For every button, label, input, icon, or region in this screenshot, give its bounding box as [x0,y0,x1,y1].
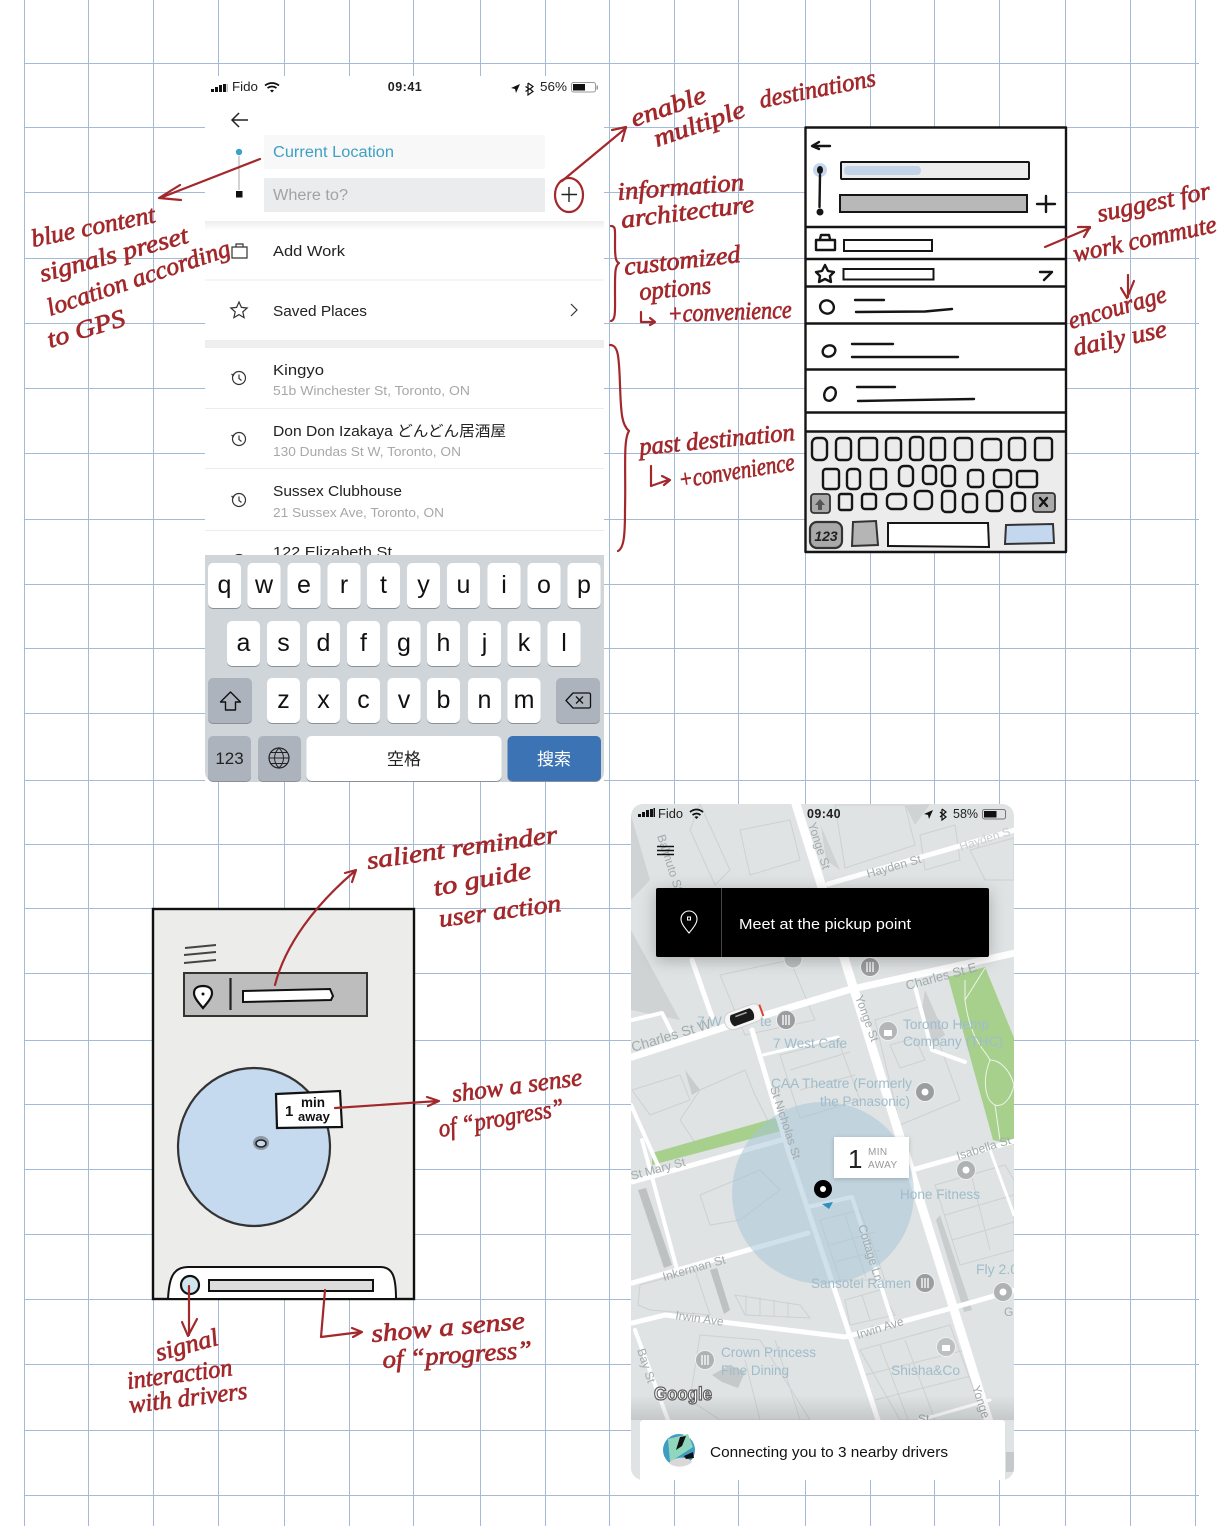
annotation: information architecture [616,169,756,234]
keyboard: a [237,629,251,657]
annotation: suggest for work commute [1045,177,1219,362]
map: pickup radius [732,1102,914,1284]
sketch: recent row 2 [821,343,958,359]
map: buildings [631,804,1014,1425]
card: 1 min away: 1 [848,1144,862,1174]
map: place labels: te [760,1013,772,1029]
card: 1 min away: MIN [868,1147,888,1158]
map: place labels: Company (THC) [903,1033,1003,1049]
list item: add work [232,243,346,260]
card: 1 min away: AWAY [868,1160,898,1171]
map: street labels: Bay St [634,1347,659,1385]
sketch: saved places row [816,265,1052,282]
list item: Don Don Izakaya: 130 Dundas St W, Toronto, ON [273,445,461,459]
keyboard: q [218,571,231,599]
status bar: 58% [953,807,978,821]
sketch: reminder banner [184,973,367,1016]
annotation: enable multiple destinations: destinations [757,65,878,114]
map: place labels: Fine Dining [721,1362,789,1378]
annotation: show a sense of progress (label): show a sense [450,1064,584,1108]
sketch: recent row 3 [822,385,974,403]
field: where to [264,178,545,212]
keyboard: b [437,686,450,714]
logo: Google: Google [654,1384,712,1404]
annotation: blue content note: signals preset [37,222,192,288]
keyboard [205,555,604,782]
panel: destination wireframe sketch [805,127,1066,552]
map: place labels: 7 West Cafe [773,1035,847,1051]
icon: back arrow [232,113,248,127]
field: current location [264,135,545,169]
card: 1 min away [834,1137,909,1178]
annotation: salient reminder: to guide [431,857,533,902]
annotation: show a sense of progress (card): of “progress” [382,1337,533,1374]
keyboard: x [317,686,330,714]
annotation: suggest for work commute: encourage [1065,281,1170,335]
map: place labels: CAA Theatre (Formerly [771,1075,912,1091]
sketch: add work row [816,235,932,251]
annotation: show a sense of progress (label) [335,1064,584,1143]
annotation: customized options bracket: options [638,272,712,306]
annotation: suggest for work commute: work commute [1071,211,1219,268]
map: place labels: Toronto Hemp [903,1016,989,1032]
annotation: show a sense of progress (card): show a sense [370,1308,526,1348]
keyboard: l [561,629,567,657]
annotation: information architecture: information [616,169,745,206]
map: place labels: the Panasonic) [820,1093,910,1109]
map: street labels: St Nicholas St [767,1085,804,1161]
list item: Kingyo: 51b Winchester St, Toronto, ON [273,384,470,398]
sketch: min away label: away [298,1109,331,1124]
map: street labels [629,821,1013,1426]
annotation: past destination bracket: +convenience [677,449,796,494]
list item: Kingyo: Kingyo [273,362,324,379]
icon: menu [657,846,674,854]
keyboard: k [518,629,531,657]
sketch: destination field [840,195,1027,212]
annotation: signal interaction with drivers: with drivers [127,1378,249,1419]
annotation: show a sense of progress (card) [321,1290,533,1374]
keyboard: r [340,571,348,599]
field: current location: Current Location [273,144,394,161]
list item: Don Don Izakaya: Don Don Izakaya どんどん居酒屋 [273,423,506,440]
list item: Kingyo [232,362,470,398]
annotation: enable multiple destinations: multiple [650,96,749,153]
map: place labels: Shisha&Co [891,1362,960,1378]
keyboard: m [514,686,534,714]
map: place labels: Crown Princess [721,1344,816,1360]
icon: car [724,1004,764,1030]
route markers [236,149,242,198]
panel: pickup wireframe sketch [153,909,414,1299]
sketch: recent row 1 [818,298,952,316]
sketch: min away label [276,1091,342,1128]
annotation: salient reminder: salient reminder [365,821,559,875]
status bar: 09:41 [388,80,422,94]
map: street labels: Yonge St [805,821,834,871]
annotation: show a sense of progress (label): of “progress” [436,1094,566,1143]
annotation: blue content note: blue content [29,201,159,253]
panel: map pickup screenshot [629,804,1018,1482]
keyboard: j [481,629,487,657]
sketch: back arrow [812,142,830,149]
annotation: information architecture: architecture [619,191,756,234]
map: street labels: Isabella St [955,1133,1013,1163]
annotation: signal interaction with drivers: interaction [125,1354,234,1395]
annotation: blue content note: to GPS [44,305,129,354]
map: place labels: Fly 2.0 [976,1261,1018,1277]
list item: add work: Add Work [273,243,346,260]
keyboard: 搜索 [537,750,571,769]
map: place labels: Sansotei Ramen [811,1275,911,1291]
keyboard: i [501,571,507,599]
sketch: pickup radius circle [178,1068,330,1226]
status bar: 56% [540,80,567,94]
list item: 122 Elizabeth St [235,546,392,555]
status bar [211,80,598,95]
keyboard: y [417,571,430,599]
list item: Sussex Clubhouse [232,483,444,520]
icon: add destination plus [562,187,577,202]
keyboard: f [360,629,367,657]
map: place labels: 7 W [697,1013,723,1029]
annotation: salient reminder [275,821,563,985]
card: connecting to drivers: Connecting you to 3 nearby drivers [710,1444,948,1461]
keyboard: v [398,686,411,714]
panel: destination search screenshot [205,76,604,782]
pickup marker [814,1180,833,1209]
map: park [652,967,1015,1165]
annotation: customized options bracket: +convenience [667,297,792,328]
status bar: Fido [232,80,258,94]
map: place labels [697,1013,1018,1378]
keyboard: u [457,571,470,599]
map: roads [631,804,1015,1425]
map: street labels: St Mary St [629,1155,688,1183]
keyboard: h [437,629,450,657]
list item: Sussex Clubhouse: 21 Sussex Ave, Toronto, ON [273,506,444,520]
icon: driver avatar [663,1434,695,1467]
annotation: enable multiple destinations [555,65,878,212]
sketch: menu icon [184,945,216,963]
map: street labels: Balmuto St [654,833,686,893]
sketch: keyboard: 123 [814,528,838,544]
list item: Don Don Izakaya [232,423,506,459]
sketch: min away label: 1 [285,1103,293,1120]
annotation: past destination bracket [610,345,796,551]
sketch: min away label: min [301,1095,325,1110]
annotation: suggest for work commute: daily use [1071,316,1169,362]
status bar [638,807,1006,821]
annotation: signal interaction with drivers: signal [153,1324,221,1367]
map: street labels: Yonge [969,1384,993,1420]
map: street labels: Inkerman St [661,1252,728,1284]
card: connecting to drivers [640,1420,1005,1482]
keyboard: s [277,629,290,657]
map: street labels: Irwin Ave [855,1314,906,1342]
map: street labels: Charles St E [904,959,979,993]
map: street labels: Hayden S [958,824,1012,854]
annotation: blue content note: location according [43,235,234,322]
annotation: customized options bracket: customized [623,241,742,281]
annotation: past destination bracket: past destination [636,419,796,461]
banner: meet at pickup point: Meet at the pickup point [739,916,912,933]
annotation: blue content note [29,159,260,354]
map: street labels: Yonge St [852,993,882,1044]
keyboard: 空格 [387,750,421,769]
sketch: keyboard [810,437,1055,548]
map: street labels: Irwin Ave [675,1308,725,1329]
keyboard: o [537,571,551,599]
field: where to: Where to? [273,187,348,204]
sketch: current location field [841,162,1029,179]
keyboard: z [277,686,290,714]
keyboard: g [397,629,411,657]
keyboard: 123 [215,749,244,768]
annotation: signal interaction with drivers [125,1286,249,1419]
keyboard: d [317,629,330,657]
annotation: customized options bracket [611,226,792,328]
map: street labels: St [918,1412,930,1426]
status bar: Fido [658,807,683,821]
map: street labels: Hayden St [865,852,923,881]
banner: meet at pickup point [656,888,989,957]
map: street labels: Cottage Ln [855,1223,886,1283]
list item: saved places: Saved Places [273,303,367,320]
map: street labels: Charles St W [629,1015,713,1055]
keyboard: n [478,686,491,714]
keyboard: t [380,571,387,599]
map: place labels: Hone Fitness [900,1186,980,1202]
keyboard: e [297,571,311,599]
map: place markers [696,950,1012,1370]
keyboard: p [577,571,591,599]
list item: Sussex Clubhouse: Sussex Clubhouse [273,483,402,500]
keyboard: w [254,571,274,599]
annotation: suggest for work commute: suggest for [1095,177,1213,228]
list item: saved places [231,302,577,320]
annotation: enable multiple destinations: enable [627,82,710,133]
list item: 122 Elizabeth St: 122 Elizabeth St [273,544,393,561]
sketch: route markers [813,163,827,216]
sketch: bottom card [168,1267,396,1299]
sketch: plus [1037,196,1055,212]
keyboard: c [357,686,370,714]
status bar: 09:40 [807,807,841,821]
map: street labels: G [1004,1305,1013,1319]
annotation: salient reminder: user action [437,890,563,933]
